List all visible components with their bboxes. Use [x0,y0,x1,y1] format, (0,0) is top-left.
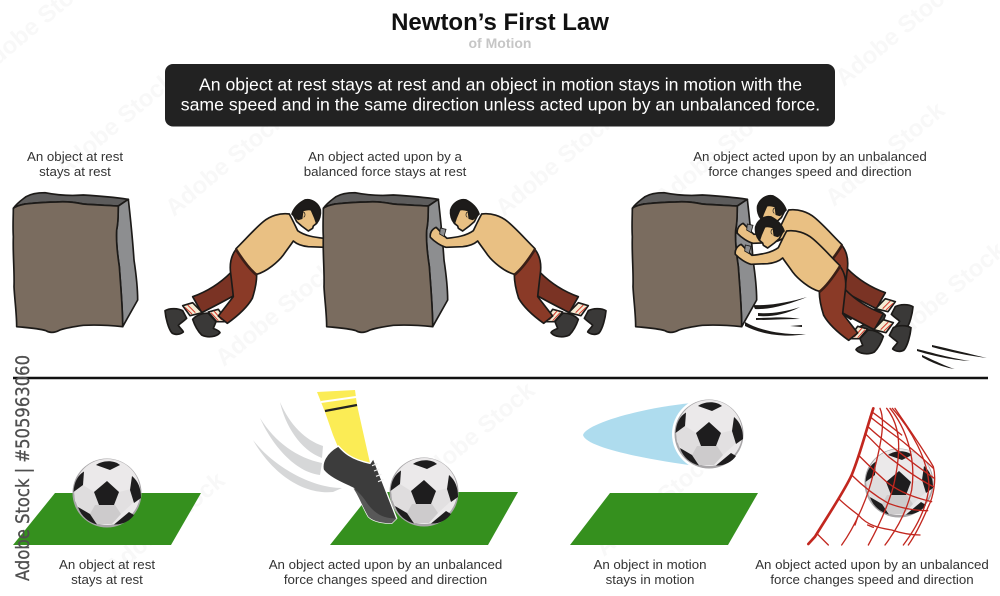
caption: ball in motion: An object in motion [593,557,707,572]
ball in the net [808,408,935,545]
divider [13,377,988,379]
title: Newton’s First Law [391,9,609,36]
subtitle: of Motion [469,35,531,51]
caption: unbalanced force on rock: An object acted upon by an unbalanced [693,149,927,164]
caption: ball at rest: stays at rest [71,572,143,587]
caption: ball stopped by net: force changes speed and direction [770,572,974,587]
caption: unbalanced force on rock: force changes speed and direction [708,164,912,179]
caption: kicked ball: force changes speed and direction [284,572,487,587]
definition banner: An object at rest stays at rest and an object in motion stays in motion with the [199,74,802,94]
balanced force scene [165,193,606,337]
moving ball and blank field [570,397,758,545]
caption: ball in motion: stays in motion [606,572,694,587]
caption: rock at rest: stays at rest [39,164,111,179]
caption: ball at rest: An object at rest [59,557,155,572]
background watermark: Adobe Stock [650,96,781,212]
caption: balanced force: An object acted upon by a [308,149,462,164]
caption: rock at rest: An object at rest [27,149,123,164]
rock at rest [13,193,138,332]
unbalanced force scene: rock, men and motion lines [632,193,987,369]
field and ball at rest [13,458,201,545]
background watermark: Adobe Stock [410,376,541,492]
background watermark: Adobe Stock [590,446,721,562]
background watermark: Adobe Stock [160,106,291,222]
stock id label: Adobe Stock | #505963060 [12,355,34,581]
background watermark: Adobe Stock [50,66,181,182]
caption: kicked ball: An object acted upon by an unbalanced [269,557,502,572]
background watermark: Adobe Stock [820,96,951,212]
background watermark: Adobe Stock [490,106,621,222]
caption: balanced force: balanced force stays at rest [304,164,467,179]
definition banner: same speed and in the same direction unless acted upon by an unbalanced force. [181,94,820,114]
definition banner [165,64,835,126]
background watermark: Adobe Stock [210,256,341,372]
kick scene [253,390,518,545]
caption: ball stopped by net: An object acted upon by an unbalanced [755,557,989,572]
background watermark: Adobe Stock [100,466,231,582]
